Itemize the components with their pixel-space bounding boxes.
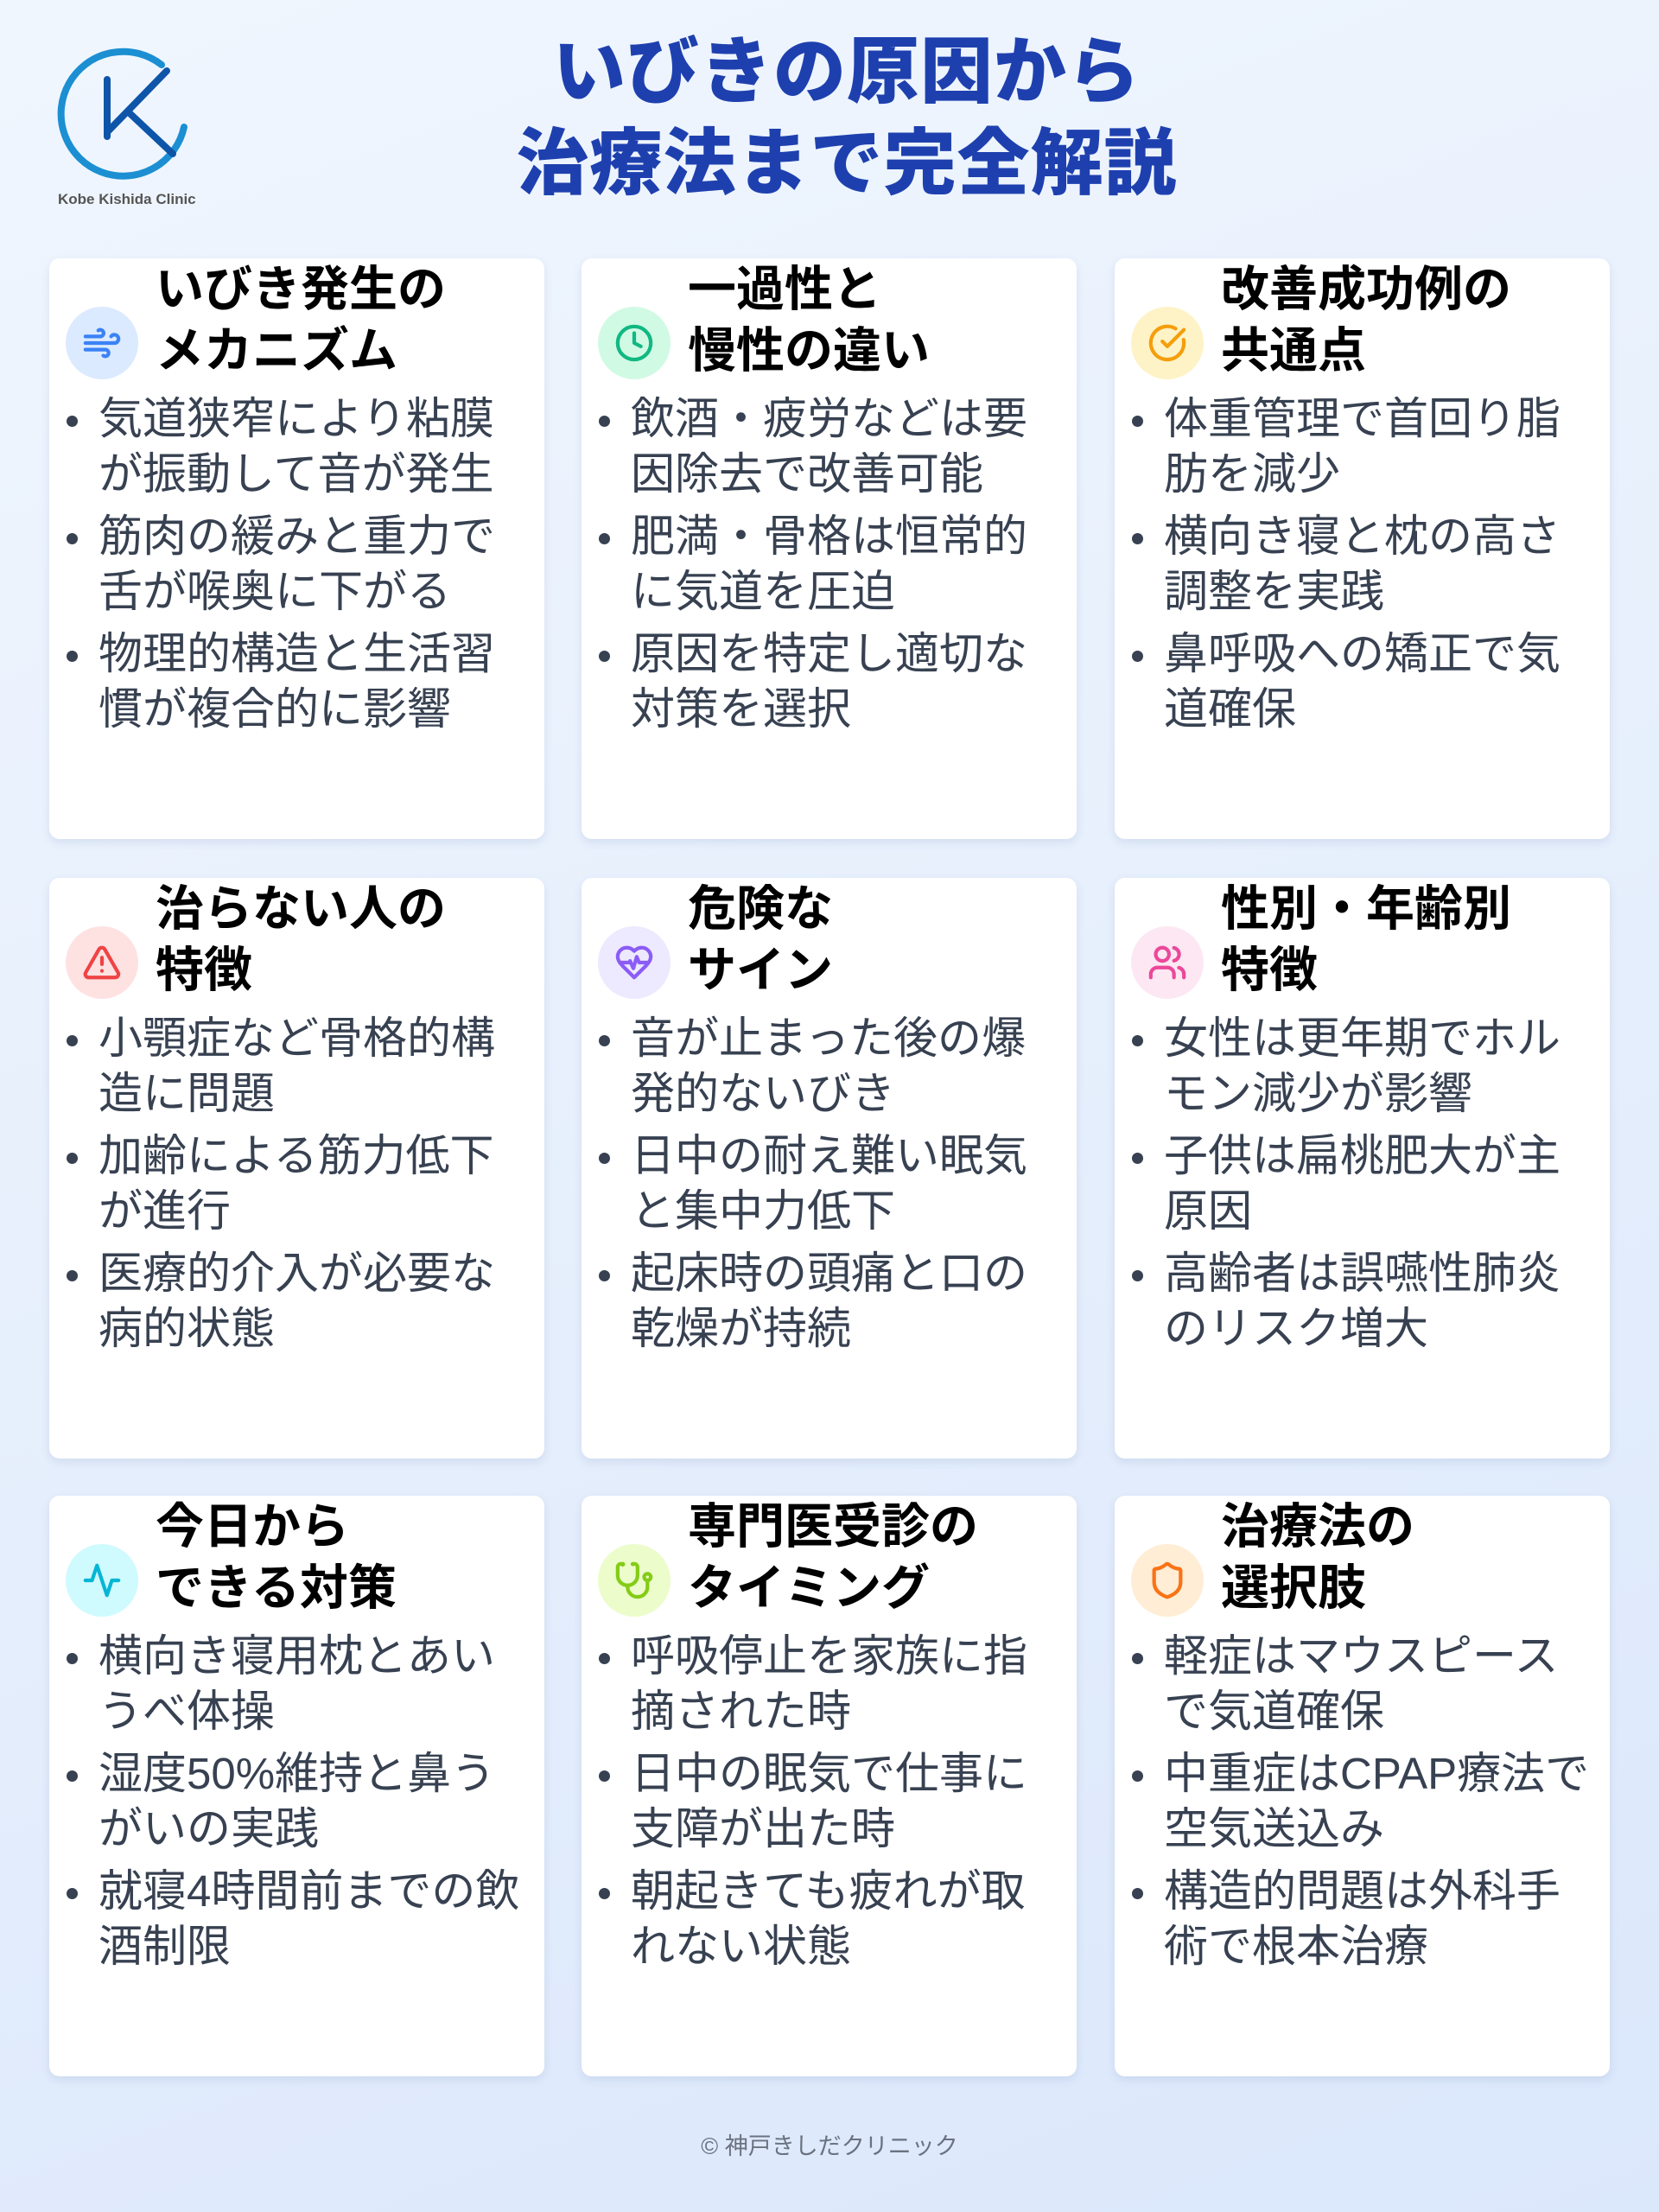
footer: © 神戸きしだクリニック (701, 2133, 958, 2159)
bullet list: 飲酒・疲労などは要 (631, 394, 1027, 443)
bullet list: 高齢者は誤嚥性肺炎 (1164, 1249, 1560, 1298)
bullet list: がいの実践 (99, 1804, 319, 1853)
bullet list: 舌が喉奥に下がる (99, 567, 451, 616)
bullet list (67, 394, 495, 734)
heading: 慢性の違い (688, 323, 930, 378)
bullet list: 支障が出た時 (631, 1804, 895, 1853)
bullet list: 体重管理で首回り脂 (1164, 394, 1560, 443)
bullet list (1132, 1014, 1560, 1353)
bullet list: 音が止まった後の爆 (631, 1014, 1026, 1063)
bullet list: 中重症はCPAP療法で (1164, 1749, 1589, 1798)
bullet list (1132, 394, 1560, 734)
heading: 特徴 (156, 943, 252, 997)
heading: 治療法の (1221, 1499, 1414, 1554)
bullet list: 加齢による筋力低下 (99, 1131, 493, 1180)
heading (688, 881, 833, 997)
bullet list: モン減少が影響 (1164, 1069, 1472, 1118)
heading: 今日から (156, 1499, 349, 1554)
heading (1221, 1499, 1414, 1615)
heading: できる対策 (156, 1560, 397, 1615)
bullet list: 鼻呼吸への矯正で気 (1164, 629, 1560, 678)
logo (57, 48, 196, 207)
bullet list: 構造的問題は外科手 (1164, 1866, 1560, 1916)
icon: activity (66, 1544, 138, 1617)
panel: timing (582, 1496, 1077, 2076)
bullet list: 日中の耐え難い眠気 (631, 1131, 1027, 1180)
bullet list: 道確保 (1164, 684, 1296, 734)
bullet list: うべ体操 (99, 1687, 275, 1736)
bullet list: 朝起きても疲れが取 (631, 1866, 1025, 1916)
bullet list: で気道確保 (1164, 1687, 1384, 1736)
bullet list (67, 1631, 519, 1971)
title: 治療法まで完全解説 (516, 123, 1177, 204)
bullet list: 就寝4時間前までの飲 (99, 1866, 519, 1916)
bullet list: 軽症はマウスピース (1164, 1631, 1558, 1681)
bullet list: 因除去で改善可能 (631, 449, 983, 499)
bullet list: 日中の眠気で仕事に (631, 1749, 1027, 1798)
bullet list: 原因を特定し適切な (631, 629, 1027, 678)
heading (688, 262, 930, 378)
heading (688, 1499, 978, 1615)
heading (156, 262, 446, 378)
icon: users (1131, 926, 1204, 999)
bullet list: 横向き寝と枕の高さ (1164, 512, 1560, 561)
heading: 治らない人の (156, 881, 446, 936)
icon: stethoscope (598, 1544, 671, 1617)
heading: 危険な (688, 881, 833, 936)
bullet list: 原因 (1164, 1186, 1252, 1236)
bullet list: が振動して音が発生 (99, 449, 493, 499)
bullet list: 乾燥が持続 (631, 1304, 851, 1353)
bullet list: 発的ないびき (631, 1069, 895, 1118)
panel: temporary vs chronic (582, 258, 1077, 839)
title (516, 31, 1177, 204)
icon: clock (598, 307, 671, 379)
bullet list: れない状態 (631, 1922, 851, 1971)
heading: 改善成功例の (1221, 262, 1511, 316)
heading (156, 1499, 397, 1615)
heading: サイン (688, 943, 833, 997)
panel: today measures (49, 1496, 544, 2076)
bullet list: 呼吸停止を家族に指 (631, 1631, 1027, 1681)
bullet list: 女性は更年期でホル (1164, 1014, 1560, 1063)
bullet list (1132, 1631, 1589, 1971)
bullet list: 小顎症など骨格的構 (99, 1014, 495, 1063)
heading: メカニズム (156, 323, 397, 378)
title: いびきの原因から (553, 31, 1141, 112)
bullet list (67, 1014, 495, 1353)
bullet list: 空気送込み (1164, 1804, 1384, 1853)
bullet list: 対策を選択 (631, 684, 851, 734)
bullet list: 物理的構造と生活習 (99, 629, 495, 678)
bullet list: 摘された時 (631, 1687, 851, 1736)
bullet list (599, 394, 1027, 734)
bullet list: のリスク増大 (1164, 1304, 1428, 1353)
panel: sex/age (1115, 878, 1610, 1459)
bullet list: と集中力低下 (631, 1186, 895, 1236)
bullet list (599, 1631, 1027, 1971)
icon: heart pulse (598, 926, 671, 999)
bullet list: 横向き寝用枕とあい (99, 1631, 495, 1681)
bullet list: 病的状態 (99, 1304, 275, 1353)
heading: 一過性と (688, 262, 881, 316)
bullet list: 肥満・骨格は恒常的 (631, 512, 1027, 561)
bullet list: 起床時の頭痛と口の (631, 1249, 1027, 1298)
heading: いびき発生の (156, 262, 446, 316)
panel: not cured (49, 878, 544, 1459)
heading: 専門医受診の (688, 1499, 978, 1554)
panel: mechanism (49, 258, 544, 839)
heading: タイミング (688, 1560, 930, 1615)
icon: warning (66, 926, 138, 999)
panel: treatment (1115, 1496, 1610, 2076)
icon: wind (66, 307, 138, 379)
bullet list: 調整を実践 (1164, 567, 1384, 616)
bullet list: 医療的介入が必要な (99, 1249, 495, 1298)
panel: success (1115, 258, 1610, 839)
heading (1221, 881, 1511, 997)
bullet list (599, 1014, 1027, 1353)
heading (1221, 262, 1511, 378)
bullet list: 酒制限 (99, 1922, 231, 1971)
heading (156, 881, 446, 997)
bullet list: 肪を減少 (1164, 449, 1340, 499)
bullet list: 湿度50%維持と鼻う (99, 1749, 495, 1798)
bullet list: 慣が複合的に影響 (99, 684, 451, 734)
bullet list: 造に問題 (99, 1069, 275, 1118)
logo: Kobe Kishida Clinic (58, 191, 196, 207)
bullet list: 子供は扁桃肥大が主 (1164, 1131, 1560, 1180)
bullet list: 術で根本治療 (1164, 1922, 1428, 1971)
bullet list: が進行 (99, 1186, 231, 1236)
heading: 特徴 (1221, 943, 1318, 997)
bullet list: に気道を圧迫 (631, 567, 895, 616)
heading: 性別・年齢別 (1221, 881, 1511, 936)
bullet list: 筋肉の緩みと重力で (99, 512, 495, 561)
heading: 共通点 (1221, 323, 1366, 378)
bullet list: 気道狭窄により粘膜 (99, 394, 494, 443)
heading: 選択肢 (1221, 1560, 1366, 1615)
panel: danger signs (582, 878, 1077, 1459)
icon: check (1131, 307, 1204, 379)
icon: shield (1131, 1544, 1204, 1617)
